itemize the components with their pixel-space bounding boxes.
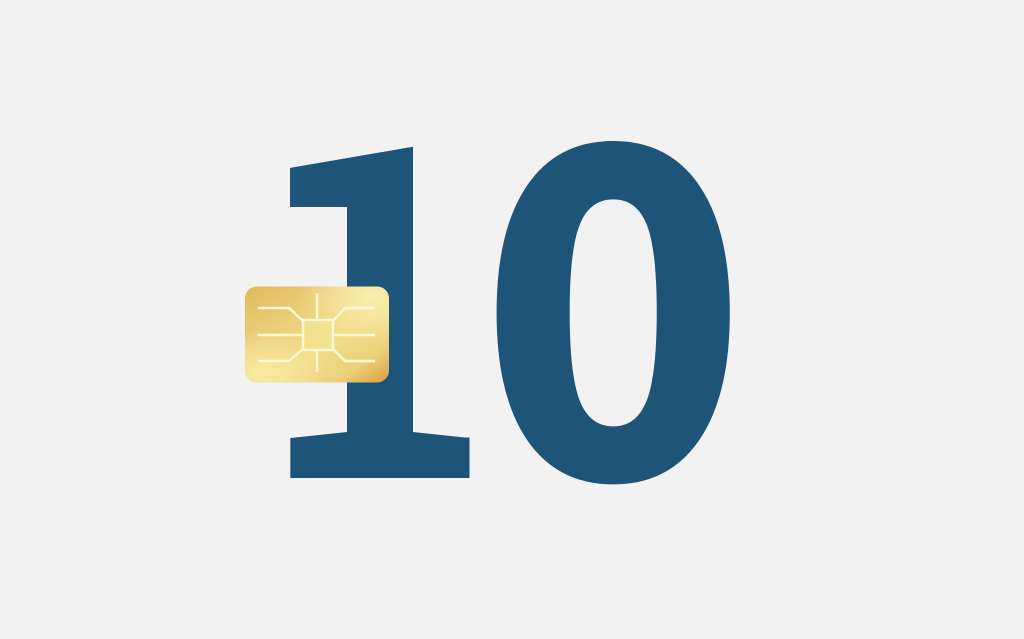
icon: gold smart card chip (245, 286, 389, 382)
number 10 (250, 57, 748, 586)
number 10: 0 (478, 57, 748, 585)
number 10: 1 (250, 58, 489, 586)
